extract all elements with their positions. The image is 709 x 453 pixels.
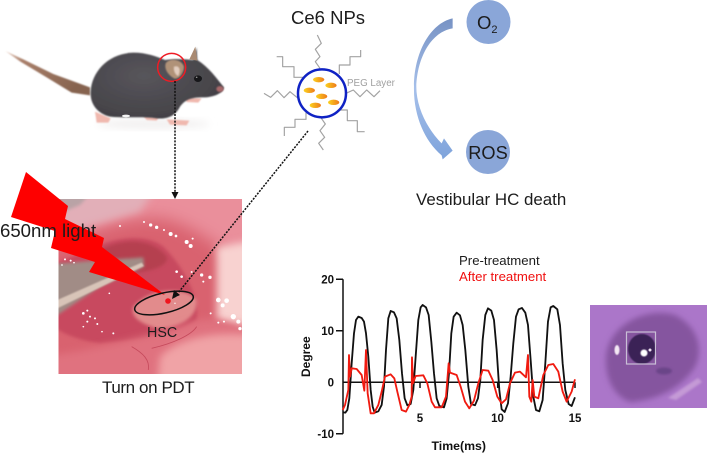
ROS circle: ROS xyxy=(468,143,508,163)
HSC ellipse xyxy=(133,287,195,319)
dotted arrow: nanoparticle to HSC xyxy=(172,131,308,299)
blood vessel xyxy=(132,327,197,370)
red circle on ear xyxy=(158,53,186,81)
label: 650nm light: 650nm light xyxy=(0,220,97,241)
x tick labels: 15 xyxy=(569,413,582,425)
axis title: Time: Time(ms) xyxy=(432,439,486,453)
pre-treatment curve xyxy=(343,305,575,413)
ROS circle xyxy=(466,130,510,174)
legend xyxy=(459,253,547,284)
mouse far ear xyxy=(189,47,197,61)
eyeball xyxy=(606,313,699,402)
eye photo xyxy=(590,305,707,408)
pupil xyxy=(628,334,656,364)
nanoparticle diagram xyxy=(264,35,380,150)
line chart xyxy=(299,253,582,453)
mouse photo xyxy=(5,47,224,129)
target tissue xyxy=(133,291,197,328)
x tick labels: 10 xyxy=(491,413,504,425)
particle shell xyxy=(298,69,346,117)
specular highlights xyxy=(61,221,242,334)
x tick labels: 5 xyxy=(417,413,424,425)
mouse nose xyxy=(216,86,224,92)
mouse belly spot xyxy=(122,115,130,117)
x tick labels xyxy=(417,413,582,425)
O2 circle xyxy=(466,0,510,44)
mouse feet xyxy=(95,97,202,125)
legend: After treatment xyxy=(459,269,547,284)
crater xyxy=(47,238,197,343)
O2 circle: O xyxy=(477,12,491,33)
axis title: Degree: Degree xyxy=(299,336,313,377)
surgical photo xyxy=(58,199,242,374)
dotted arrow: mouse ear to photo xyxy=(172,81,178,199)
instrument xyxy=(50,257,144,320)
mouse body xyxy=(91,47,224,119)
label: Vestibular HC death: Vestibular HC death xyxy=(416,190,566,209)
legend: Pre-treatment xyxy=(459,253,540,268)
mouse tail xyxy=(5,51,90,95)
highlights xyxy=(614,345,620,355)
y tick labels: 20 xyxy=(321,274,334,286)
label: PEG Layer: PEG Layer xyxy=(347,78,396,89)
y tick labels xyxy=(317,274,334,441)
label: Ce6 NPs: Ce6 NPs xyxy=(291,7,365,28)
Ce6 cargo xyxy=(304,77,339,108)
label: Turn on PDT: Turn on PDT xyxy=(102,378,194,397)
y tick labels: -10 xyxy=(317,429,334,441)
PEG chains xyxy=(264,35,380,150)
lightning bolt: 650nm light xyxy=(11,172,165,295)
selection box xyxy=(626,332,656,364)
O2 circle: 2 xyxy=(491,24,498,36)
mouse eye xyxy=(194,75,202,82)
upper rim xyxy=(80,199,242,250)
y tick labels: 0 xyxy=(328,378,334,390)
treatment spot xyxy=(165,298,171,304)
after-treatment curve xyxy=(343,350,575,413)
y tick labels: 10 xyxy=(321,326,334,338)
mouse ear xyxy=(165,60,184,79)
label: HSC: HSC xyxy=(147,325,177,341)
lower tissue xyxy=(58,316,242,374)
axes xyxy=(336,279,575,434)
right bright area xyxy=(211,238,242,330)
curved arrow: O2 to ROS xyxy=(414,18,453,159)
